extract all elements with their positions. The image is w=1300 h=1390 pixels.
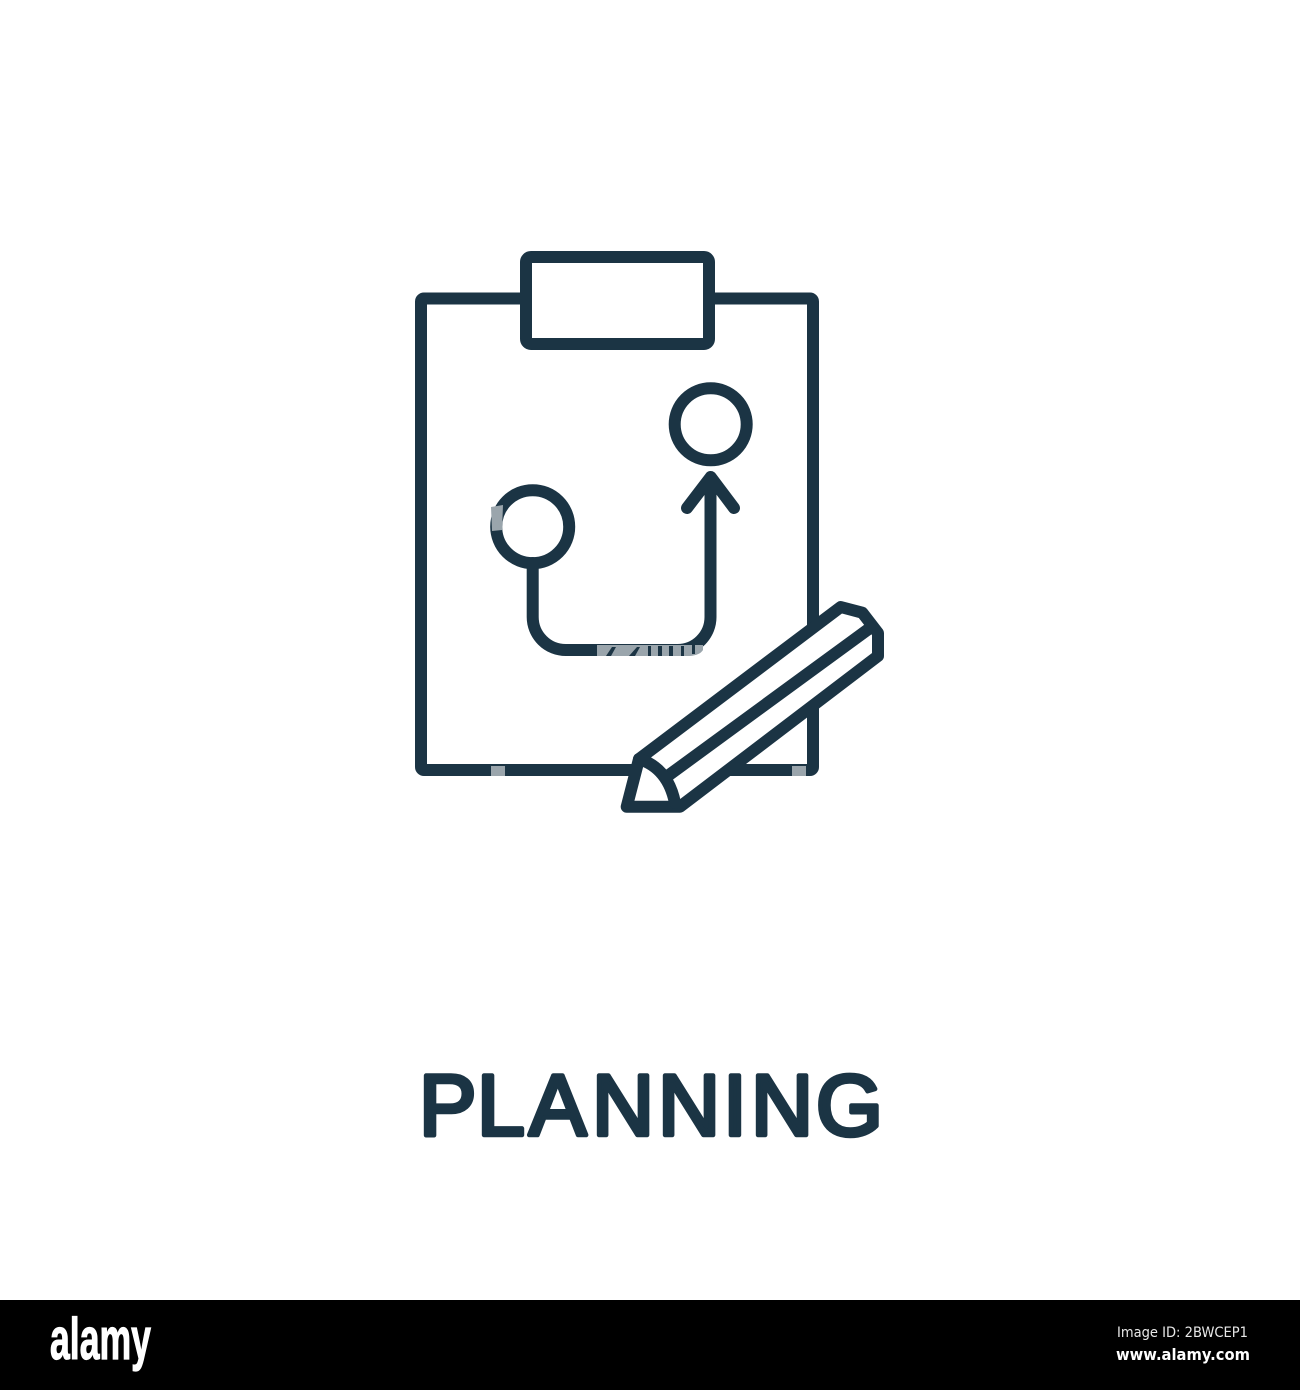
icon: clipboard board bbox=[421, 298, 813, 770]
footer bar bbox=[0, 1300, 1300, 1390]
icon: clipboard clip bbox=[526, 257, 709, 344]
watermark slits bbox=[606, 640, 695, 656]
icon: planning clipboard with pencil bbox=[421, 257, 878, 807]
watermark fragments bbox=[491, 505, 806, 776]
icon: destination circle bbox=[675, 388, 747, 460]
icon: pencil bbox=[627, 607, 878, 807]
footer logo: alamy bbox=[50, 1307, 151, 1372]
arrow: route from origin to destination bbox=[533, 477, 734, 650]
icon: origin circle bbox=[496, 490, 569, 563]
image id: Image ID: 2BWCEP1 bbox=[1117, 1325, 1248, 1341]
title: PLANNING bbox=[419, 1058, 883, 1154]
website: www.alamy.com bbox=[1116, 1345, 1250, 1364]
